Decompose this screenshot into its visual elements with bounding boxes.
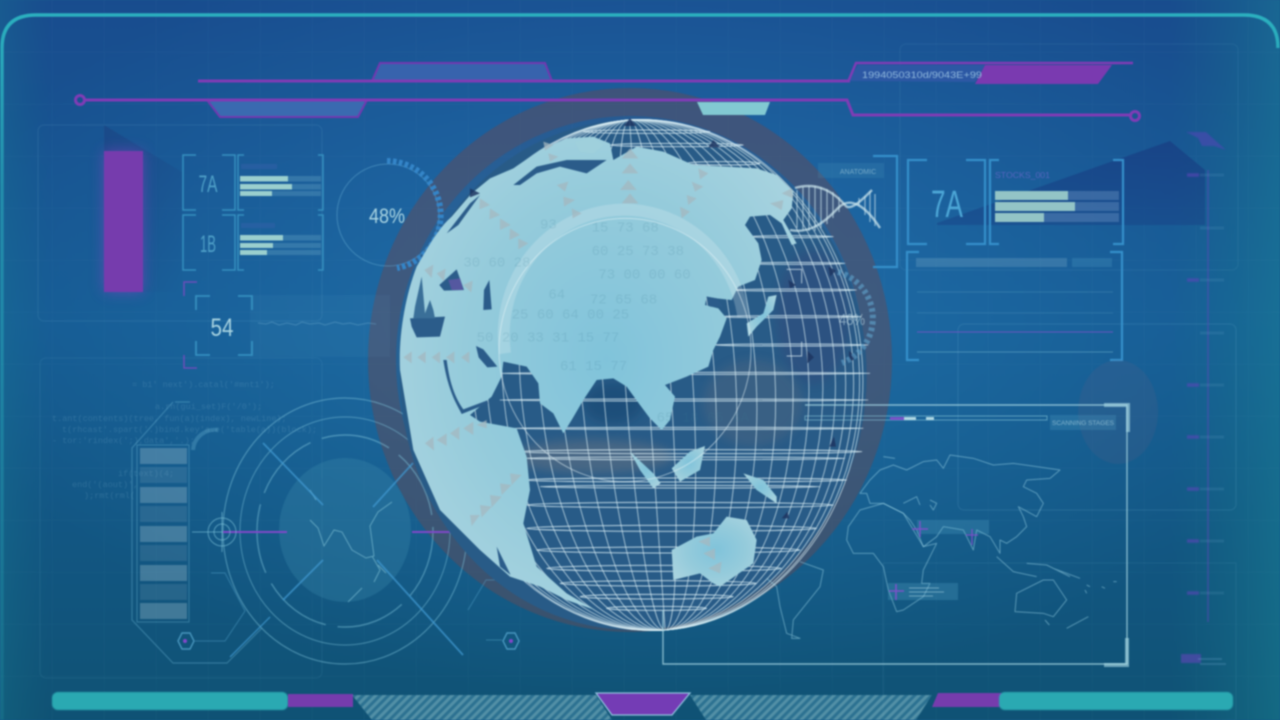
land inlets (410, 138, 723, 575)
scrolling code text: t(rhcast'.spart('.)bind.key'a.e('table(a))(block); (62, 425, 317, 435)
bars 1B (240, 223, 321, 255)
small globe (279, 458, 411, 602)
radar target (192, 512, 236, 552)
header line: lower with node (76, 96, 1140, 120)
label right 7A: 7A (931, 184, 963, 226)
table panel right (907, 252, 1122, 360)
top header lines (76, 63, 1140, 120)
map frame (663, 405, 1128, 665)
left hatched segment (352, 695, 612, 720)
bracket and tag near DNA: ANATOMIC (840, 169, 876, 176)
header line: upper (198, 80, 850, 82)
panel: upper left outline (38, 125, 322, 321)
right hatched segment (690, 695, 932, 720)
gauge 48% (337, 161, 441, 268)
scrolling code text: - tor:'rindex(';),data','.); (52, 436, 195, 446)
readout 7A (183, 155, 323, 210)
header accent tab (697, 102, 770, 115)
globe land masses (400, 137, 797, 610)
land: Borneo (672, 446, 705, 482)
land hex digits: 65 18 65 6A (657, 411, 750, 427)
globe meridians (415, 105, 880, 645)
right purple segment (932, 693, 1002, 707)
land hex digits: 50 20 33 31 15 77 (477, 331, 619, 347)
centre purple tab (596, 693, 690, 715)
panel: middle right outline (958, 324, 1236, 510)
panel: code outline (40, 358, 322, 678)
right gauge 48% (838, 272, 873, 363)
radar rings (223, 398, 467, 664)
land hex digits: 73 00 00 60 (598, 267, 691, 283)
counter 54 (184, 282, 390, 368)
dark mountain chart (937, 141, 1205, 225)
scrolling code text: a.rn(gui_set)F('/0'); (155, 402, 262, 412)
land: Japan (747, 295, 777, 337)
scrolling code text: end('(aout)', (72, 480, 138, 490)
map callout upper (912, 520, 989, 545)
right gauge 48%: 48% (839, 312, 865, 329)
scrolling code text: if(text)(4; (118, 469, 174, 479)
map tag: SCANNING STAGES (1052, 420, 1115, 427)
small globe map (310, 490, 392, 602)
readout 1B (183, 215, 323, 270)
land: Sumatra (630, 452, 661, 488)
land: Australia (672, 517, 757, 587)
land hex digits: 60 25 73 38 (592, 244, 684, 260)
globe (400, 105, 880, 645)
left purple segment (288, 694, 353, 707)
readout tab: 1994050310d/9043E+99 (862, 70, 982, 80)
small hex left (178, 573, 245, 649)
hud dome (193, 430, 218, 450)
readout tab (848, 63, 1133, 84)
counter 54: 54 (210, 314, 234, 342)
bracket and tag near DNA (818, 156, 897, 267)
header tab: lower left (207, 100, 367, 117)
radar purple axis (223, 531, 450, 533)
faint globe upper right (1078, 360, 1158, 464)
panel: lower right outline (883, 563, 1236, 720)
radar with menu column (132, 398, 519, 664)
header tab: upper centre (372, 63, 552, 81)
label 1B: 1B (200, 231, 216, 258)
land hex digits: 25 60 64 00 25 (512, 307, 629, 323)
map top scale (805, 416, 1047, 420)
globe crosshair marks (787, 269, 802, 356)
left cyan segment (52, 692, 288, 710)
land: New Guinea (743, 473, 777, 503)
scrolling code text: );rmt(rml( (84, 491, 135, 501)
land hex digits (463, 217, 750, 427)
small hex right (468, 580, 519, 649)
land hex digits: 15 73 68 (592, 221, 659, 237)
dark direction markers (470, 118, 856, 518)
scrolling code text: t.ant(contents)(tree, fun(a)(index), newLine); (52, 414, 287, 424)
panel: upper right outline (900, 44, 1238, 270)
gauge 48%: 48% (369, 205, 405, 228)
label 7A: 7A (198, 171, 218, 198)
land hex digits: 72 65 68 (590, 292, 657, 308)
land hex digits: 64 (548, 287, 565, 303)
globe ocean (400, 120, 867, 630)
bottom status bar (52, 692, 1233, 720)
purple status bar (104, 125, 182, 292)
scrolling code text: = b1' next').catal('#mnt1'); (132, 380, 275, 390)
DNA helix (790, 186, 880, 231)
label stocks: STOCKS_001 (995, 170, 1050, 180)
globe parallels (500, 130, 870, 610)
radar crosshair (230, 443, 463, 657)
hud octagon (132, 402, 262, 663)
land hex digits: 30 60 28 (463, 256, 530, 272)
readout right 7A (908, 160, 1123, 244)
map continents (767, 455, 1117, 638)
ring behind globe (368, 88, 892, 632)
right vertical ruler (1181, 132, 1226, 664)
bars right 7A (995, 191, 1119, 222)
menu column (137, 445, 189, 622)
land hex digits: 93 (540, 217, 557, 233)
map callout lower (888, 583, 958, 600)
bars 7A (240, 164, 321, 196)
land hex digits: 61 15 77 (560, 359, 627, 375)
land inner ring (499, 210, 751, 482)
map tag (1050, 415, 1116, 430)
gray direction markers (403, 142, 793, 573)
world map panel (663, 405, 1128, 665)
right cyan segment (999, 692, 1233, 710)
scrolling code text (52, 380, 317, 501)
